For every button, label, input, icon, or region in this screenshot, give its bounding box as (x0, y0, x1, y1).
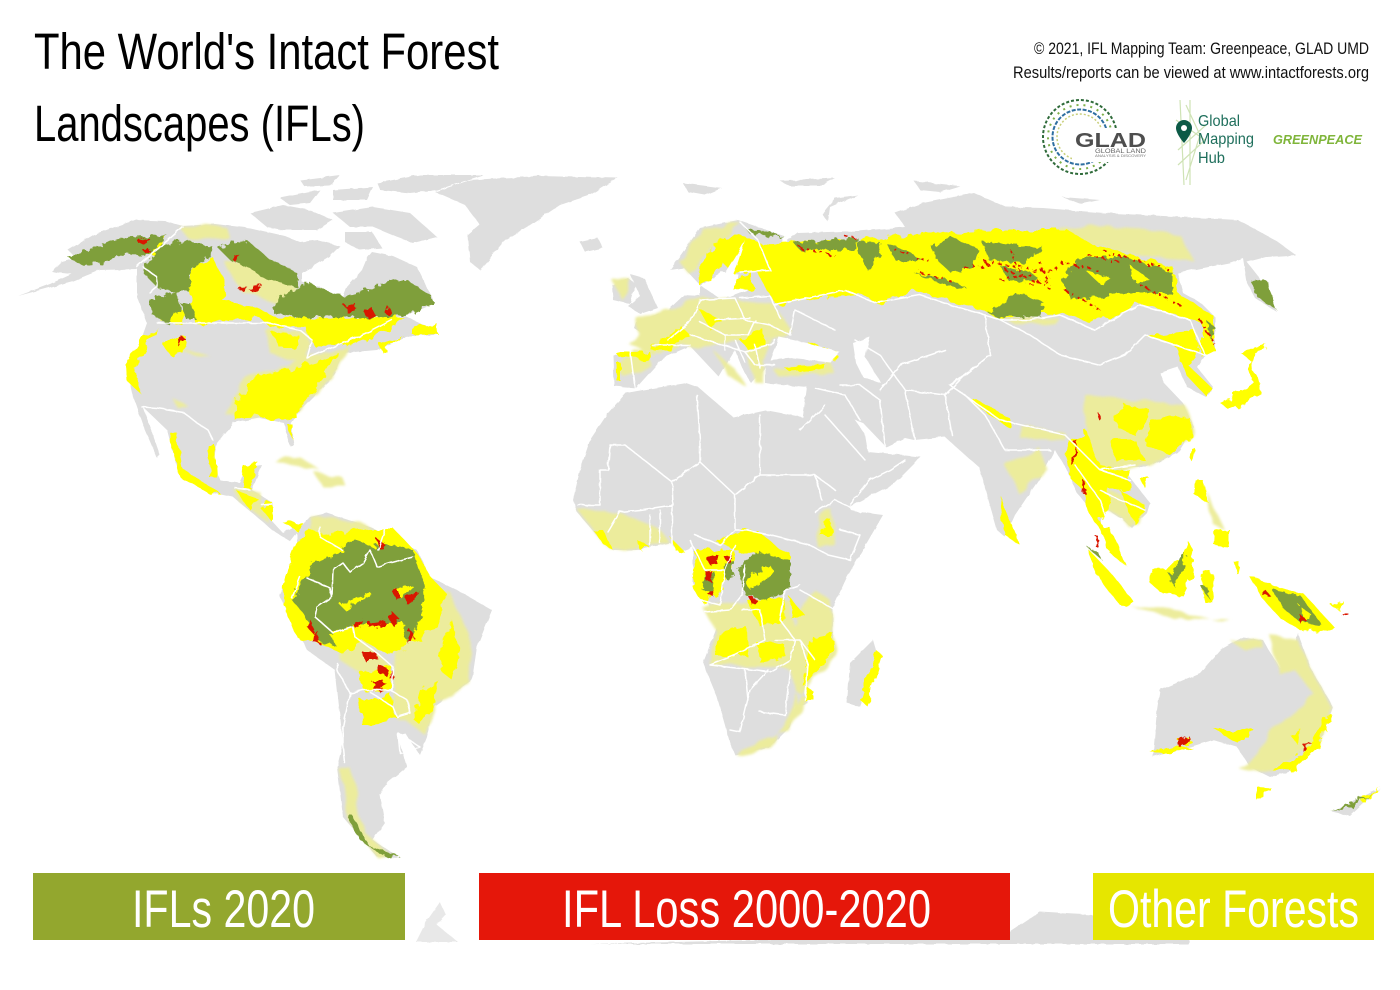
country borders (137, 222, 1205, 763)
logo: GLAD: ANALYSIS & DISCOVERY (1095, 153, 1146, 158)
pale: Brazil and South America (300, 516, 470, 858)
North America land (18, 220, 437, 541)
yellow: Indonesia and New Guinea (1087, 528, 1345, 630)
red: Congo patches (706, 555, 756, 604)
pale: Asia (880, 225, 1332, 770)
forest patches inside green (340, 265, 1312, 620)
GLAD wordmark: GLAD (1075, 130, 1146, 152)
Madagascar land (847, 640, 878, 707)
red: Southeast Asia marks (1072, 412, 1100, 548)
green: central and eastern Canada (217, 240, 433, 317)
yellow: Alaska and Canada boreal and eastern US (127, 236, 437, 440)
title (34, 23, 499, 152)
yellow: China, Indochina, Korea, Japan (972, 330, 1266, 565)
logo: Global Mapping Hub (1176, 100, 1254, 185)
green: Congo (702, 552, 790, 600)
borders: Arabia (850, 460, 905, 505)
white gap behind wordmark (1072, 128, 1152, 162)
hub wordmark (1198, 113, 1254, 167)
pale: Europe (612, 222, 835, 385)
borders: North America (137, 227, 392, 505)
green: Patagonia (346, 815, 400, 857)
Antarctic Peninsula (416, 902, 458, 942)
GLAD subtitle: GLOBAL LAND (1095, 149, 1147, 155)
yellow other forests layer (127, 230, 1382, 802)
South America land (280, 513, 492, 858)
legend: IFLs 2020 (33, 873, 405, 940)
GLAD dashed ring mark (1043, 100, 1117, 174)
borders: Europe (630, 222, 835, 388)
Eurasia land (613, 193, 1296, 567)
green: New Guinea, Borneo, Sumatra, Sulawesi, New Zealand (1088, 548, 1372, 812)
hub wordmark: Global (1198, 113, 1240, 130)
yellow veins in Amazon and Siberia (340, 265, 1312, 620)
green: Russia and Siberia (745, 228, 1277, 340)
red intact forest loss layer (138, 236, 1348, 752)
borders: Russia, Central Asia, China (775, 290, 1205, 520)
borders: Africa (578, 395, 860, 732)
Gulf of Bothnia and inland seas (718, 240, 886, 448)
Antarctica land (590, 912, 1190, 944)
green: Alaska and Yukon (68, 235, 167, 265)
hub wordmark: Hub (1198, 150, 1225, 167)
pale: Africa (578, 510, 835, 755)
red: Amazon and Andes patches (306, 540, 418, 690)
hub network lines (1176, 100, 1206, 185)
yellow: Scandinavia and Russia band (698, 230, 1215, 357)
yellow: Australia and New Zealand (1150, 712, 1382, 802)
yellow: Bolivia, Paraguay, Argentina and south Brazil (360, 620, 460, 725)
Arctic Canada islands (250, 175, 483, 250)
yellow: Europe patches (615, 272, 838, 380)
Africa land (573, 383, 883, 755)
red: New Guinea and Australia patches (1178, 590, 1348, 752)
world map (18, 175, 1382, 944)
Islands: Europe, Arctic, Asia-Pacific (580, 178, 1380, 816)
copyright and source text (1013, 39, 1369, 82)
pale: North America (166, 226, 350, 522)
hub wordmark: Mapping (1198, 131, 1254, 148)
map pin icon (1176, 120, 1192, 143)
title: The World's Intact Forest (34, 23, 499, 80)
title: Landscapes (IFLs) (34, 95, 365, 152)
red: mountain strips in Myanmar and China (1072, 412, 1100, 548)
legend: IFL Loss 2000-2020: IFL Loss 2000-2020 (562, 880, 931, 939)
red: scattered marks in Russia (800, 236, 1215, 345)
Australia land (1153, 633, 1333, 777)
pale other forests layer (166, 222, 1332, 858)
legend: IFLs 2020: IFLs 2020 (132, 880, 315, 939)
yellow: Amazon margin (282, 530, 445, 655)
green: Amazon (292, 538, 424, 645)
Greenland (435, 176, 618, 270)
yellow: Central America and Mexico (168, 430, 305, 532)
red: Siberia scattered patches (800, 236, 1215, 345)
borders: South America (292, 527, 420, 763)
inland seas (718, 240, 886, 448)
logo: GLAD (1043, 100, 1152, 174)
land: grey continents (18, 175, 1380, 944)
green: western Canada (143, 240, 213, 323)
green intact forest landscapes layer (68, 228, 1372, 857)
yellow: Africa (593, 518, 882, 705)
logo: Greenpeace: GREENPEACE (1273, 132, 1362, 147)
red: Canada and Alaska patches (138, 238, 391, 346)
